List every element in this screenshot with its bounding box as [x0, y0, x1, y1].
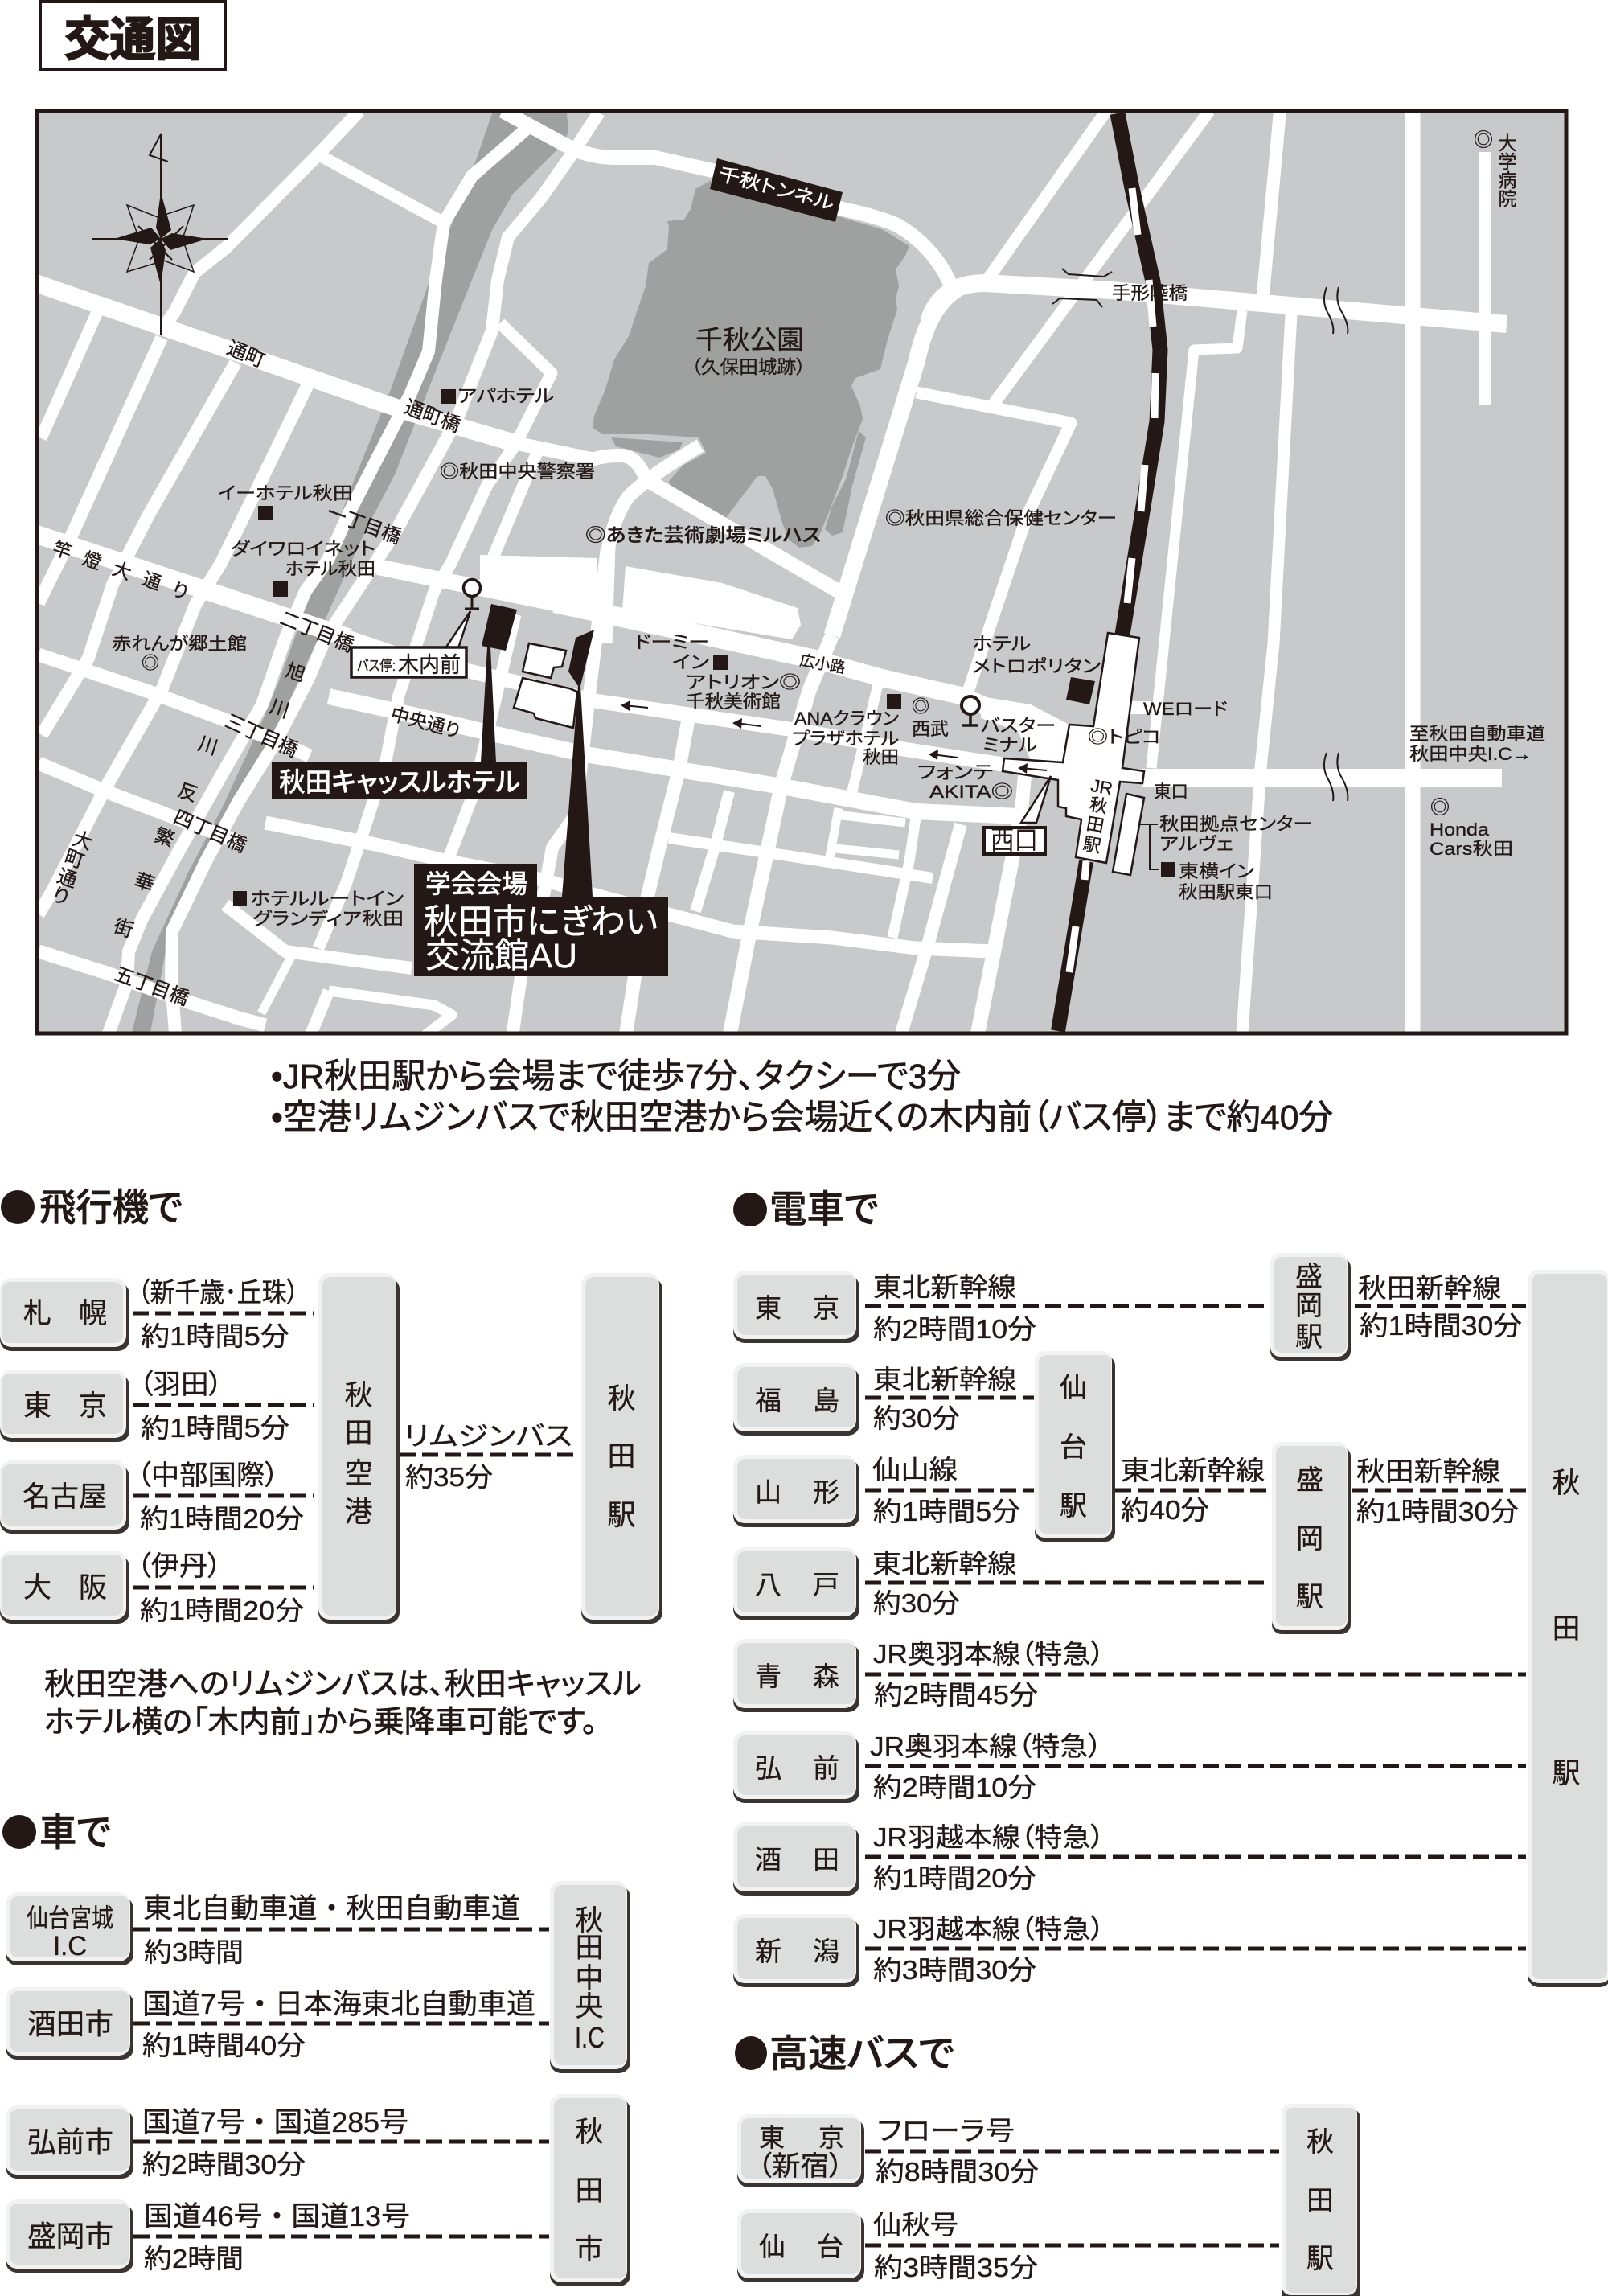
route: 山形: 仙山線	[872, 1455, 958, 1485]
place labels: アルヴェ	[1159, 834, 1233, 854]
place labels: ダイワロイネット	[231, 539, 375, 559]
place labels: 東口	[1154, 782, 1188, 802]
station box: 秋田中央I.C: 秋田中央	[575, 1905, 604, 2023]
route: 青森: JR奥羽本線（特急）	[873, 1639, 1105, 1669]
route: 仙台宮城I.C	[6, 1892, 549, 1967]
route: 福島: 東北新幹線	[873, 1365, 1016, 1394]
road and bridge labels: 通町	[224, 338, 268, 372]
link: 東北新幹線 Sendai to Morioka: 約40分	[1121, 1495, 1209, 1525]
station box: 秋田駅	[581, 1273, 662, 1624]
road and bridge labels: 広小路	[798, 651, 847, 677]
road and bridge labels: 旭	[283, 659, 308, 686]
route: 東京	[0, 1370, 314, 1443]
place labels: 秋田	[863, 747, 899, 767]
place labels: イン	[672, 652, 709, 672]
place labels: ミナル	[982, 735, 1037, 755]
route: 福島: 福島	[755, 1386, 839, 1415]
route: 盛岡市: 約2時間	[144, 2244, 244, 2273]
place labels: 大学病院	[1499, 133, 1516, 209]
place labels: WEロード	[1143, 699, 1228, 719]
label: conference venue	[414, 864, 668, 976]
heading: by car	[2, 1811, 111, 1854]
road and bridge labels: 竿燈大通り	[50, 537, 191, 603]
route: 東京: 約1時間5分	[141, 1413, 289, 1443]
transfer: 盛岡駅 upper: 盛岡駅	[1295, 1262, 1323, 1353]
river: 旭川	[132, 113, 568, 1033]
station box: 秋田駅: 秋田駅	[607, 1383, 636, 1531]
route: 弘前	[733, 1731, 1526, 1803]
route: 東京	[733, 1271, 1269, 1344]
station box: 秋田中央I.C: I.C	[575, 2021, 605, 2054]
route: 仙台: 仙秋号	[873, 2210, 958, 2240]
station building	[1003, 633, 1144, 863]
route: 青森: 約2時間45分	[874, 1680, 1038, 1710]
road and bridge labels: 街	[111, 915, 136, 942]
station box: 秋田駅 (bus): 秋田駅	[1306, 2127, 1334, 2274]
transfer: 仙台駅: 仙台駅	[1060, 1373, 1087, 1522]
route: 福島	[733, 1363, 1034, 1436]
route: 酒田市: 約1時間40分	[142, 2031, 306, 2060]
route: 新潟: 約3時間30分	[873, 1955, 1036, 1985]
route: 酒田: JR羽越本線（特急）	[873, 1822, 1105, 1852]
route: 東京(新宿): 東京	[759, 2123, 844, 2152]
route: 酒田市	[6, 1987, 549, 2060]
route: 札幌: 札幌	[23, 1298, 107, 1329]
route: 弘前: 弘前	[755, 1753, 839, 1783]
link: 秋田新幹線 upper: 秋田新幹線	[1358, 1273, 1501, 1303]
route: 弘前市	[6, 2105, 549, 2179]
route: 酒田市: 国道7号・日本海東北自動車道	[142, 1989, 535, 2020]
route: 酒田: 酒田	[755, 1845, 839, 1875]
route: 名古屋: 約1時間20分	[140, 1504, 304, 1534]
route: 弘前: JR奥羽本線（特急）	[870, 1731, 1102, 1761]
road and bridge labels: 五丁目橋	[112, 963, 191, 1010]
place labels: ◎秋田県総合保健センター	[885, 508, 1117, 528]
station box: 秋田市	[550, 2094, 630, 2286]
route: 盛岡市: 国道46号・国道13号	[144, 2201, 410, 2232]
place labels	[112, 129, 1545, 929]
route: 大阪: （伊丹）	[137, 1551, 222, 1582]
link: limousine bus: 約35分	[405, 1462, 493, 1492]
label: conference venue: 交流館AU	[425, 937, 577, 975]
route: 酒田市: 酒田市	[27, 2007, 113, 2040]
route: 東京(新宿): （新宿）	[757, 2151, 843, 2182]
label: conference venue: 秋田市にぎわい	[424, 903, 658, 942]
panel: plane routes	[0, 1273, 662, 1625]
place labels: ホテル	[972, 634, 1031, 654]
route: 仙台宮城I.C: 約3時間	[144, 1937, 244, 1967]
park label: （久保田城跡）	[691, 356, 806, 377]
Alve building	[1113, 794, 1144, 875]
route: 東京: 東北新幹線	[873, 1272, 1016, 1302]
place labels: ホテルルートイン	[250, 889, 404, 909]
road and bridge labels: 大	[70, 828, 95, 854]
road and bridge labels: 反	[175, 779, 200, 806]
bus terminal pin	[962, 696, 979, 725]
panel: highway bus routes	[737, 2104, 1360, 2296]
link: 秋田新幹線 upper: 約1時間30分	[1360, 1311, 1522, 1341]
venue building and pointer	[562, 630, 594, 897]
station box: 秋田市: 秋田市	[575, 2117, 604, 2265]
road and bridge labels: 川	[267, 696, 292, 722]
bus stop pin: 木内前: 木内前	[398, 653, 461, 677]
route: 弘前市: 国道7号・国道285号	[142, 2107, 408, 2138]
castle hotel building and pointer	[481, 604, 517, 762]
title: 交通図	[40, 2, 225, 69]
road and bridge labels: 四丁目橋	[170, 806, 249, 857]
label: tunnel	[710, 158, 843, 222]
place labels: アパホテル	[457, 386, 554, 406]
place labels: 田	[1085, 813, 1106, 836]
route: 弘前市: 弘前市	[27, 2126, 113, 2158]
route: 新潟: JR羽越本線（特急）	[873, 1914, 1105, 1944]
route: 札幌: 約1時間5分	[141, 1321, 289, 1351]
route: 大阪: 大阪	[23, 1572, 107, 1604]
place labels: 手形陸橋	[1112, 283, 1188, 303]
link: 秋田新幹線 lower	[1352, 1456, 1526, 1526]
route: 東京(新宿)	[737, 2114, 1279, 2187]
place labels: プラザホテル	[792, 729, 899, 749]
route: 東京: 東京	[755, 1293, 839, 1323]
place labels: 至秋田自動車道	[1409, 724, 1545, 744]
station box: 秋田中央I.C	[550, 1881, 630, 2073]
road and bridge labels: り	[50, 884, 72, 910]
place labels: AKITA◎	[929, 782, 1013, 802]
transfer: 盛岡駅 lower: 盛岡駅	[1296, 1465, 1323, 1612]
panel: car routes	[6, 1881, 630, 2286]
route: 東京(新宿): 約8時間30分	[876, 2157, 1039, 2187]
heading: by car: 車で	[39, 1811, 111, 1854]
link: 秋田新幹線 lower: 約1時間30分	[1356, 1497, 1519, 1526]
route: 新潟	[733, 1914, 1526, 1987]
route: 大阪: 約1時間20分	[140, 1596, 304, 1625]
text block: limousine note	[44, 1668, 642, 1739]
link: limousine bus: リムジンバス	[404, 1421, 572, 1451]
station box: 秋田駅 (bus)	[1282, 2104, 1360, 2296]
park label: 千秋公園	[695, 325, 804, 355]
place labels: 東横イン	[1179, 861, 1254, 881]
panel: train routes	[733, 1253, 1608, 1987]
place labels: ◎	[1430, 797, 1450, 819]
route: 名古屋	[0, 1460, 314, 1534]
transfer: 仙台駅	[1035, 1351, 1115, 1542]
place labels: バスター	[981, 716, 1056, 736]
bus stop pin: 木内前: バス停:	[357, 658, 396, 674]
route: 盛岡市: 盛岡市	[27, 2220, 113, 2253]
road network	[35, 111, 1507, 1037]
text block: limousine note: ホテル横の「木内前」から乗降車可能です。	[44, 1706, 597, 1739]
place labels: グランディア秋田	[252, 909, 404, 929]
panel: access map	[35, 111, 1566, 1037]
route: 名古屋: 名古屋	[23, 1481, 107, 1513]
overpass marks and road-break marks	[1052, 269, 1348, 801]
route: 山形: 約1時間5分	[873, 1497, 1020, 1526]
label: tunnel: 千秋トンネル	[716, 163, 836, 214]
leader lines: Alve and Toyoko Inn	[1139, 824, 1159, 869]
bus stop pin: 木内前	[351, 579, 481, 677]
place labels: ◎	[142, 653, 159, 673]
place labels: ◎秋田中央警察署	[440, 462, 595, 482]
route: 仙台	[737, 2209, 1279, 2282]
place labels: 秋田拠点センター	[1159, 814, 1313, 834]
place labels: ホテル秋田	[285, 559, 375, 579]
place labels: ドーミー	[634, 632, 709, 652]
text block: limousine note: 秋田空港へのリムジンバスは、秋田キャッスル	[44, 1668, 642, 1702]
text block: access notes: •JR秋田駅から会場まで徒歩7分、タクシーで3分	[271, 1058, 961, 1096]
route: 盛岡市	[6, 2199, 549, 2273]
link: 東北新幹線 Sendai to Morioka	[1115, 1456, 1270, 1525]
place labels: メトロポリタン	[972, 656, 1101, 676]
route: 八戸	[733, 1547, 1269, 1620]
route: 仙台宮城I.C: I.C	[53, 1931, 87, 1961]
place labels: 駅	[1081, 833, 1102, 856]
road and bridge labels: 三丁目橋	[222, 710, 301, 762]
place labels: Cars秋田	[1430, 839, 1513, 859]
venue white buildings	[514, 643, 577, 728]
station box: 秋田駅 (train)	[1528, 1270, 1608, 1987]
route: 仙台宮城I.C: 東北自動車道・秋田自動車道	[143, 1893, 520, 1924]
compass	[92, 134, 228, 335]
road and bridge labels: 華	[132, 869, 157, 896]
route: 八戸: 東北新幹線	[872, 1549, 1016, 1579]
road and bridge labels: 川	[195, 733, 220, 759]
route: 東京: （羽田）	[139, 1370, 223, 1400]
route: 青森: 青森	[755, 1661, 839, 1691]
road and bridge labels: 中央通り	[388, 703, 462, 741]
map background	[37, 111, 1566, 1033]
station box: 秋田駅 (train): 秋田駅	[1552, 1468, 1581, 1789]
route: 東京: 約2時間10分	[873, 1314, 1036, 1344]
hotel metropolitan building	[1066, 677, 1095, 704]
text block: access notes	[271, 1058, 1333, 1137]
label: conference venue: 学会会場	[425, 869, 527, 898]
road and bridge labels: 町	[62, 846, 87, 873]
route: 札幌: （新千歳･丘珠）	[137, 1278, 299, 1308]
place labels: ◎あきた芸術劇場ミルハス	[585, 524, 821, 545]
walking arrows	[621, 700, 1047, 774]
link: 秋田新幹線 upper	[1355, 1273, 1526, 1341]
route: 札幌	[0, 1278, 314, 1351]
place labels: ◎	[912, 696, 929, 717]
place labels: 秋	[1088, 794, 1109, 817]
route: 大阪	[0, 1551, 314, 1625]
route: 名古屋: （中部国際）	[137, 1460, 279, 1491]
road and bridge labels: 通	[55, 865, 80, 892]
station box: 秋田空港: 秋田空港	[344, 1380, 373, 1528]
link: 東北新幹線 Sendai to Morioka: 東北新幹線	[1121, 1456, 1265, 1485]
link: limousine bus	[400, 1421, 577, 1492]
route: 仙台: 約3時間35分	[874, 2253, 1038, 2282]
place labels: 赤れんが郷土館	[112, 634, 247, 654]
route: 東京(新宿): フローラ号	[877, 2116, 1015, 2146]
road and bridge labels: 通町橋	[401, 396, 463, 437]
heading: by train: 電車で	[769, 1188, 879, 1230]
west exit callout: 西口	[991, 825, 1038, 855]
place labels: 千秋美術館	[686, 692, 781, 712]
place labels: 西武	[912, 719, 949, 739]
heading: by plane: 飛行機で	[39, 1186, 183, 1229]
title: 交通図: 交通図	[64, 14, 201, 66]
route: 仙台宮城I.C: 仙台宮城	[27, 1904, 113, 1933]
road and bridge labels: 繁	[152, 824, 177, 851]
place labels: ANAクラウン	[794, 709, 899, 729]
route: 山形	[733, 1455, 1034, 1527]
place labels: アトリオン◎	[686, 672, 801, 692]
route: 八戸: 約30分	[873, 1588, 960, 1618]
route: 酒田: 約1時間20分	[873, 1863, 1036, 1893]
label: castle hotel: 秋田キャッスルホテル	[279, 767, 520, 797]
place labels: 秋田中央I.C→	[1409, 744, 1532, 764]
west exit callout	[984, 776, 1051, 855]
route: 東京: 東京	[23, 1390, 107, 1422]
place labels: JR	[1089, 775, 1114, 799]
route: 福島: 約30分	[873, 1403, 960, 1433]
route: 山形: 山形	[755, 1477, 839, 1507]
route: 酒田	[733, 1822, 1526, 1896]
place labels: フォンテ	[917, 762, 993, 782]
road and bridge labels: 一丁目橋	[324, 502, 404, 548]
place labels: Honda	[1430, 819, 1490, 840]
route: 青森	[733, 1639, 1526, 1712]
heading: by highway bus: 高速バスで	[769, 2032, 954, 2075]
text block: access notes: •空港リムジンバスで秋田空港から会場近くの木内前（バス停）まで約40分	[271, 1099, 1333, 1137]
place labels: 秋田駅東口	[1179, 882, 1273, 902]
map frame	[37, 111, 1566, 1033]
route: 弘前市: 約2時間30分	[142, 2150, 306, 2179]
place labels: ◎トピコ	[1088, 727, 1161, 747]
route: 八戸: 八戸	[755, 1570, 839, 1600]
route: 弘前: 約2時間10分	[873, 1772, 1036, 1802]
road and bridge labels: 二丁目橋	[277, 608, 356, 657]
park label	[691, 325, 806, 377]
transfer: 盛岡駅 lower	[1272, 1442, 1351, 1634]
park: 千秋公園	[593, 181, 909, 548]
station box: 秋田空港	[318, 1273, 400, 1624]
route: 仙台: 仙台	[759, 2232, 843, 2261]
route: 新潟: 新潟	[755, 1937, 839, 1966]
link: 秋田新幹線 lower: 秋田新幹線	[1356, 1456, 1500, 1486]
railway line	[1058, 113, 1160, 1031]
place labels: イーホテル秋田	[218, 483, 353, 503]
place labels: ◎	[1474, 129, 1493, 151]
road and bridge labels	[50, 338, 847, 1010]
transfer: 盛岡駅 upper	[1270, 1253, 1351, 1361]
